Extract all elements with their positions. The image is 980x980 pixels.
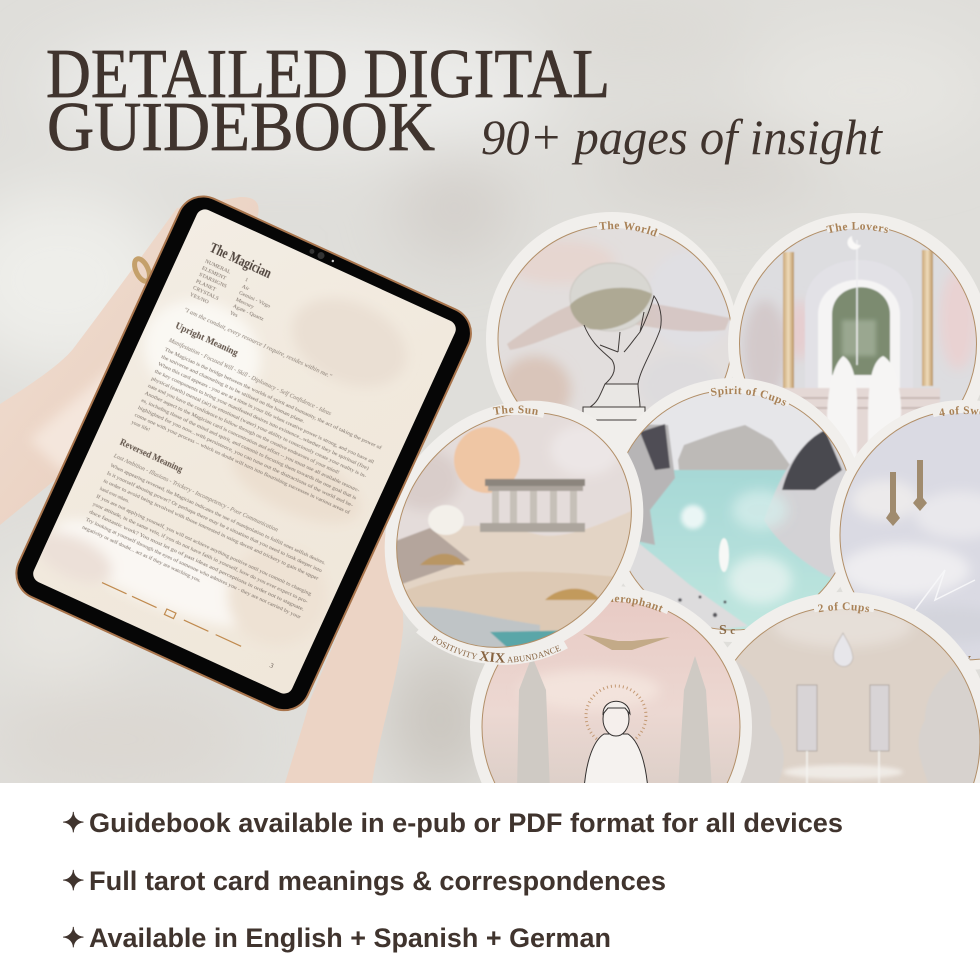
guidebook page text: Upright Meaning	[174, 320, 240, 358]
guidebook page text: Lost Ambition - Illusions - Trickery - Incompetency - Poor Communication	[112, 453, 279, 534]
guidebook page text: YES/NO	[189, 292, 210, 306]
guidebook page text: Is it yourself abusing power? Or perhaps there may be a situation that you need to look deeper into	[106, 471, 323, 574]
guidebook page text: The Magician	[207, 240, 274, 282]
card: The Sun	[384, 400, 644, 665]
guidebook page text: your life!	[130, 420, 151, 433]
left hand holding tablet	[0, 197, 259, 525]
tablet	[7, 187, 481, 720]
guidebook page text: nate and you have the confidence to follow through on the creative endeavors of your mind!	[147, 384, 340, 476]
card: The Lovers	[728, 213, 980, 458]
guidebook page text: NUMERAL	[204, 259, 232, 276]
card: The World: The World	[598, 221, 658, 237]
card: 2 of Cups	[728, 592, 980, 783]
card bottom numeral: V	[961, 654, 971, 669]
guidebook page text	[79, 239, 431, 630]
page number: 3	[268, 661, 275, 670]
feature line 3: ✦	[62, 923, 85, 953]
card: The World	[486, 212, 734, 442]
guidebook page text: hand over others.	[99, 487, 130, 505]
feature line 2: ✦	[62, 866, 85, 896]
guidebook page text: Another aspect to the Magician card is concentration and effort -- you must use all available resourc-	[143, 391, 360, 494]
guidebook page text: Manifestation - Focused Will - Skill - Diplomacy - Self Confidence - Ideas	[167, 336, 333, 418]
guidebook page text: the universe and channeling it to be utilised on the human plane.	[160, 355, 305, 425]
card: The Hierophant	[470, 586, 752, 783]
guidebook page text: come one with your process -- which no doubt will turn into flourishing successes in various areas of	[133, 413, 350, 516]
gold footer ornament	[101, 580, 242, 649]
card: Spirit of Cups: Spirit of Cups	[710, 386, 786, 406]
guidebook page text: STARSIGNS	[198, 272, 228, 290]
guidebook page text: physical (earth) mental (air) or emotional (water) your ability to consciously create your reality is in-	[150, 377, 367, 480]
guidebook page text: Try looking at yourself through the eyes of someone who admires you - they are not carried by your	[84, 518, 302, 621]
guidebook page text: When this card appears - you are at a time in your life when creative power is strong, and you have all	[157, 362, 375, 466]
guidebook page text: PLANET	[195, 279, 217, 293]
white feature panel	[0, 783, 980, 980]
guidebook page text: "I am the conduit, every resource I require, resides within me."	[183, 307, 333, 380]
card bottom caption: POSITIVITY XIX ABUNDANCE	[431, 636, 561, 663]
card: Spirit of Cups	[624, 378, 852, 642]
guidebook page text: es, including those of the mind and spirit, and commit to focusing them towards the one goal that is	[140, 399, 357, 501]
card: The Hierophant: The Hierophant	[610, 596, 663, 612]
card: The Lovers: The Lovers	[826, 222, 888, 234]
feature line 3: Available in English + Spanish + German	[89, 923, 611, 953]
tablet camera	[308, 247, 335, 265]
card: 4 of Swords	[830, 400, 980, 670]
guidebook page text: negativity or self doubt... act as if they are watching you.	[81, 526, 201, 584]
guidebook page text: ELEMENT	[201, 265, 228, 282]
guidebook page text: CRYSTALS	[192, 285, 219, 302]
guidebook page text: The Magician is the bridge between the worlds of spirit and humanity, the act of taking the power of	[163, 348, 382, 451]
subtitle: 90+ pages of insight	[481, 109, 883, 165]
card: 2 of Cups: 2 of Cups	[818, 602, 870, 614]
feature line 1: ✦	[62, 808, 85, 838]
right hand holding tablet	[285, 528, 403, 783]
guidebook page text: Yes	[229, 310, 239, 319]
crystal-holding hand drawing	[583, 296, 661, 460]
title: DETAILED DIGITAL	[46, 36, 610, 113]
card bottom letters: S c	[719, 623, 735, 638]
tablet screen	[23, 203, 459, 697]
card: The Sun: The Sun	[492, 406, 538, 415]
feature line 1: Guidebook available in e-pub or PDF format for all devices	[89, 808, 843, 838]
guidebook page text: If you are not applying yourself, you will not achieve anything positive until you commit to changing	[95, 495, 312, 598]
title: GUIDEBOOK	[47, 89, 435, 166]
guidebook page text: the key components to bring your manifested desires into existence...whether they be spiritual (fire)	[153, 370, 370, 472]
guidebook page text: Agate - Quartz	[232, 303, 265, 323]
guidebook page text: 1	[244, 277, 249, 284]
guidebook page text: in order to avoid being involved with those interested in using deceit and trickery to gain the upper	[102, 479, 319, 582]
guidebook page text: highlighted for you now...with persistence, you can tune out the distractions of the world and be-	[137, 406, 354, 509]
guidebook page text: When appearing reversed, the Magician indicates the use of manipulation to fulfill ones selfish desires.	[109, 464, 326, 566]
guidebook page text: Mercury	[235, 297, 255, 310]
guidebook page text: duce fantastic work? You must let go of past ideas and perceptions in order not to stagnate.	[88, 510, 305, 613]
title	[46, 36, 610, 166]
feature line 2: Full tarot card meanings & correspondences	[89, 866, 666, 896]
guidebook page text: Reversed Meaning	[118, 437, 185, 474]
guidebook page text: Gemini - Virgo	[238, 290, 271, 310]
guidebook page text: your attitude, in the same vein, if you do not have faith in yourself, how do you ever expect to pro-	[92, 502, 309, 605]
guidebook page text: Air	[241, 284, 250, 292]
